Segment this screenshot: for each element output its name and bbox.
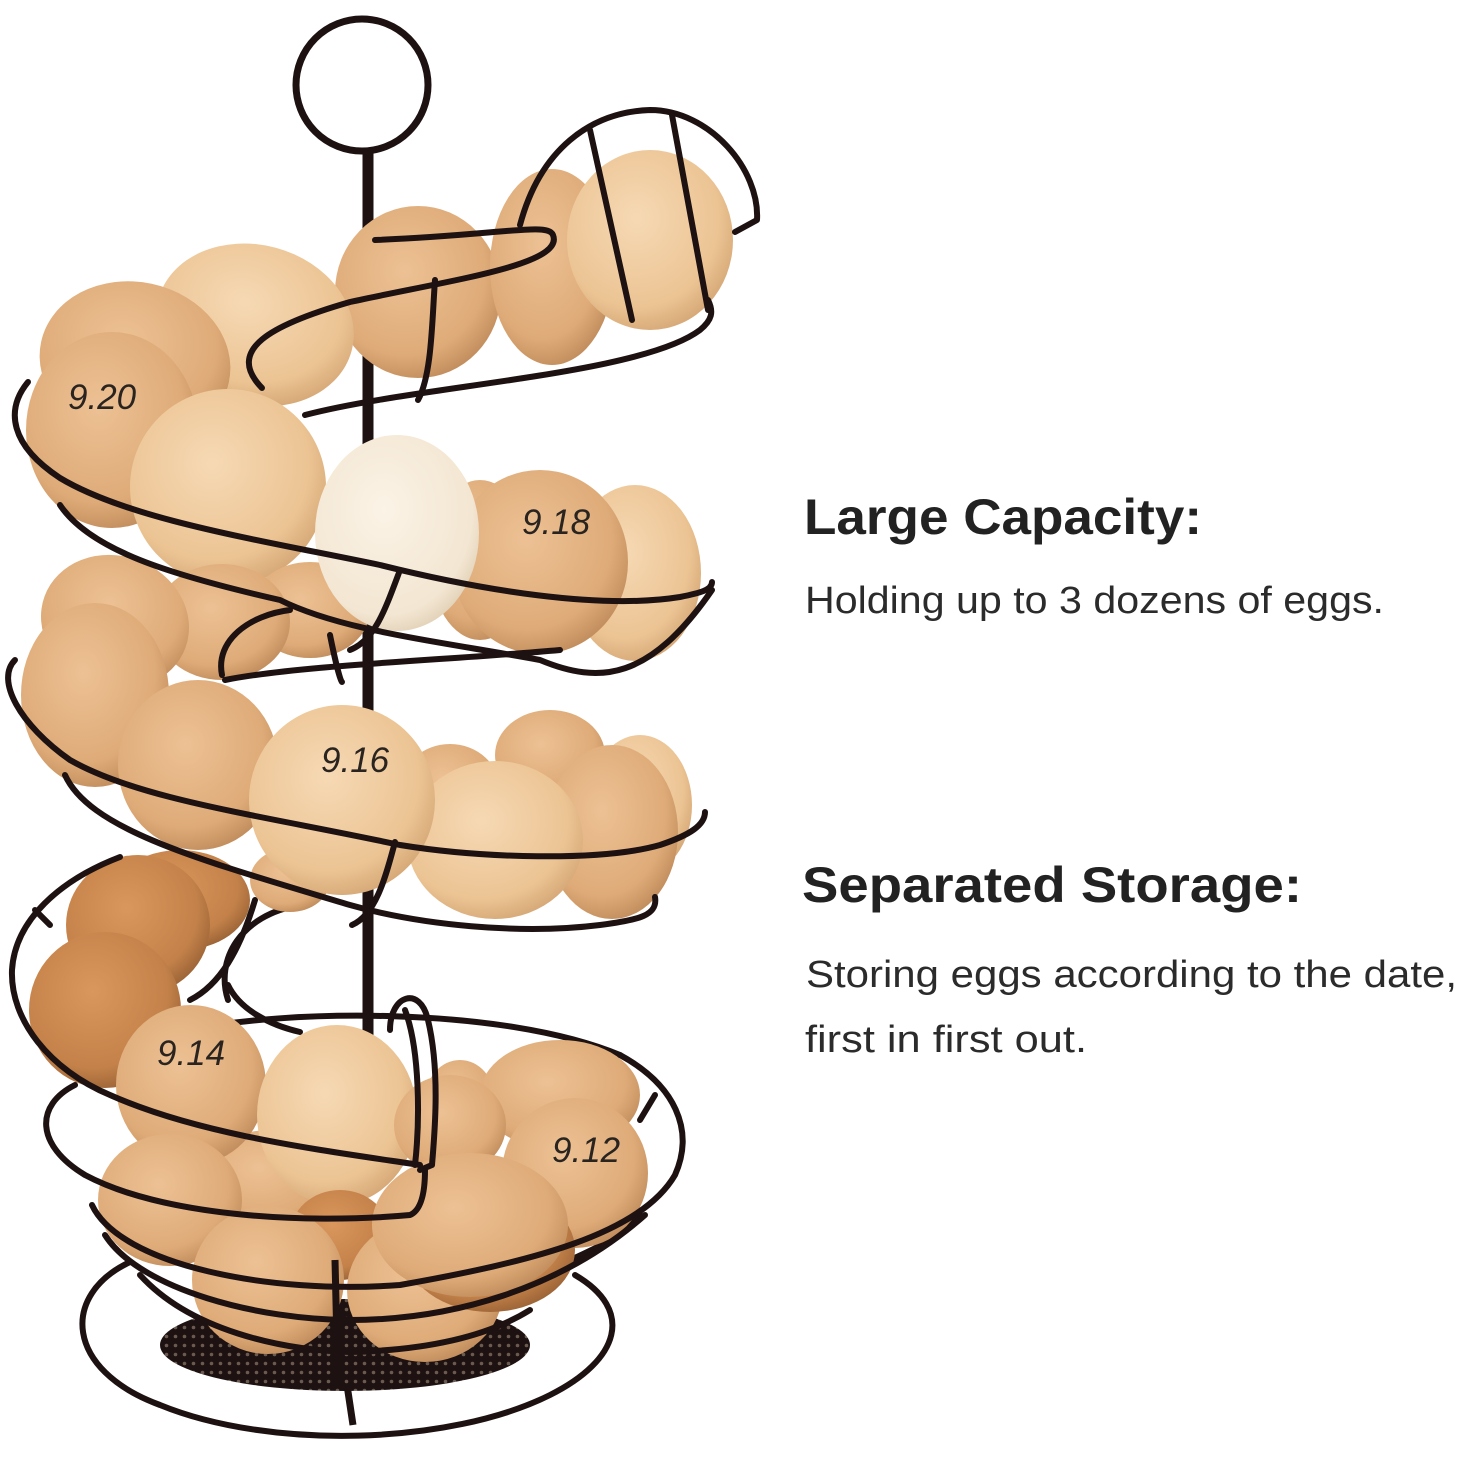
rack front wires <box>8 110 757 1385</box>
second tier rails <box>15 382 712 601</box>
rack back wires and stem <box>82 19 640 1436</box>
heading: separated storage: Separated Storage: <box>802 857 1302 913</box>
lower hook <box>390 998 436 1170</box>
third tier rails <box>8 660 705 856</box>
front leg <box>335 1260 338 1385</box>
date 9.18: 9.18 <box>522 503 591 542</box>
date 9.16: 9.16 <box>321 741 390 780</box>
eggs <box>21 150 733 1362</box>
top tier eggs <box>24 150 733 585</box>
fourth tier eggs <box>29 850 417 1230</box>
bottom tier rails <box>46 1085 425 1219</box>
back spiral wires <box>190 900 640 1265</box>
second tier eggs <box>22 435 701 710</box>
text: storage description: first in first out. <box>805 1019 1087 1061</box>
date labels on eggs <box>68 378 620 1170</box>
top arch <box>520 110 757 232</box>
mesh basket floor <box>160 1299 530 1391</box>
third tier eggs <box>21 603 692 919</box>
section: separated storage <box>802 857 1457 1061</box>
text: capacity description: Holding up to 3 dozens of eggs. <box>805 580 1384 622</box>
bottom tier eggs <box>98 1040 648 1362</box>
text: storage description: Storing eggs according to the date, <box>806 954 1457 996</box>
date 9.12: 9.12 <box>552 1131 620 1170</box>
date 9.20: 9.20 <box>68 378 137 417</box>
top ring handle <box>296 19 428 151</box>
base leg <box>347 1385 353 1425</box>
date 9.14: 9.14 <box>157 1034 225 1073</box>
section: large capacity <box>804 489 1384 622</box>
stem <box>362 150 374 1060</box>
top chute rails <box>249 229 554 388</box>
heading: large capacity: Large Capacity: <box>804 489 1202 545</box>
fourth tier rails <box>12 857 420 1165</box>
base ring <box>82 1262 612 1436</box>
